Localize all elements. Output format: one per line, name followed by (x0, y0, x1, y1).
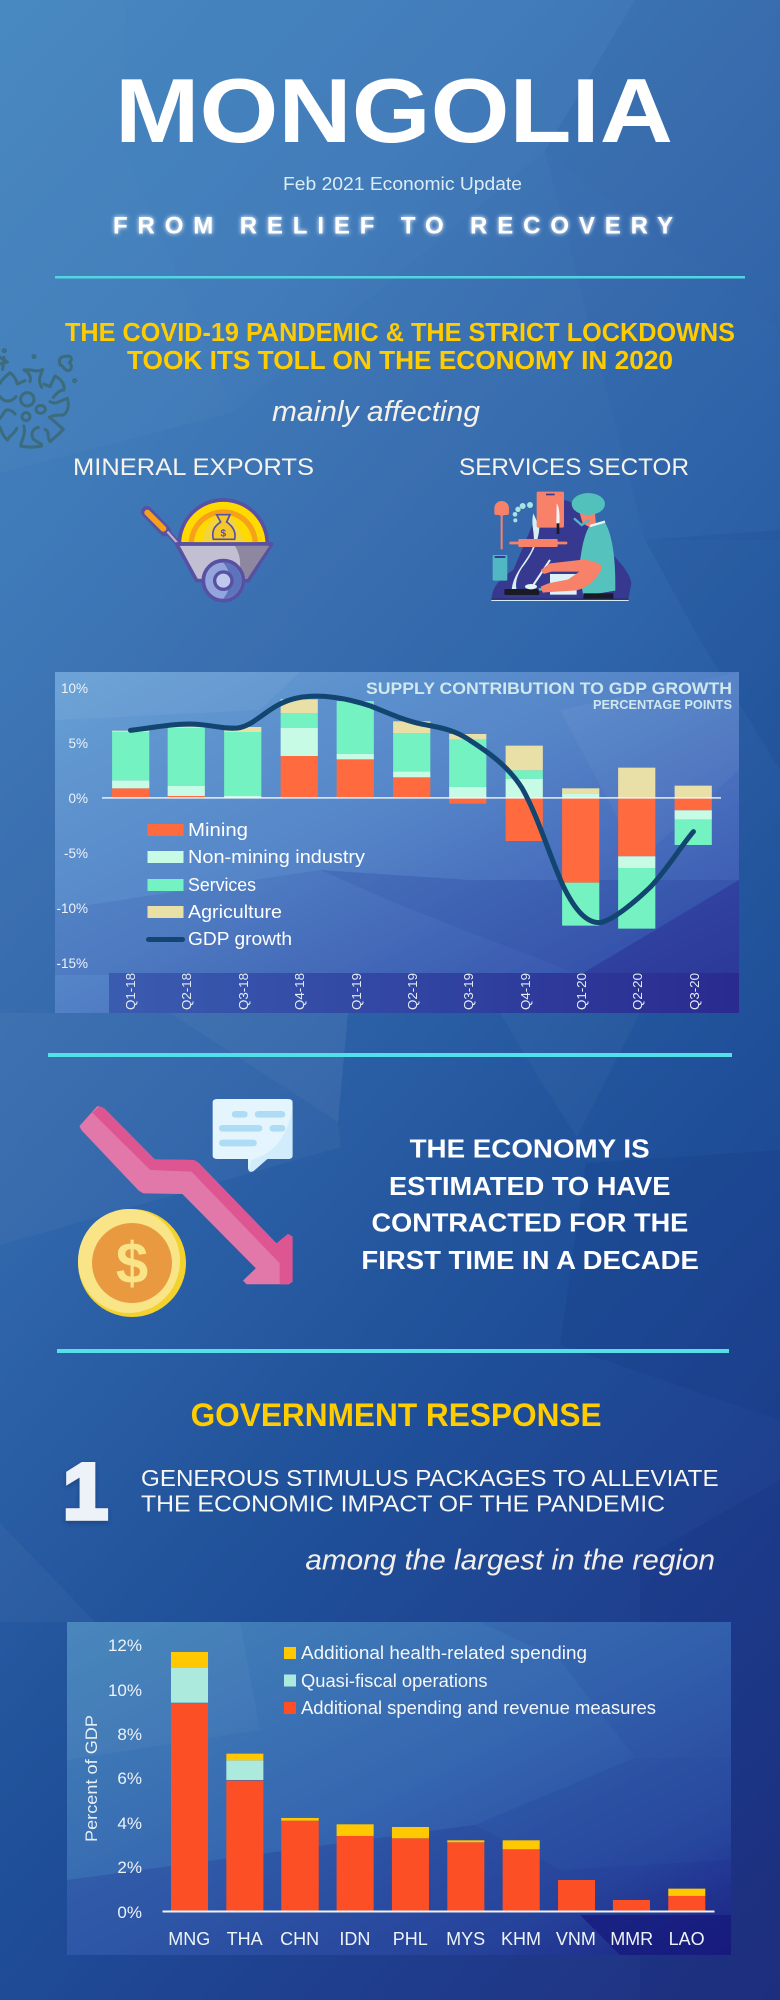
bar LAO (668, 1889, 705, 1911)
number 1: 1 (63, 1446, 108, 1536)
icon: wheelbarrow with money (147, 500, 272, 601)
chart subtitle: PERCENTAGE POINTS (593, 697, 732, 712)
icon: cook in kitchen (491, 492, 631, 601)
GDP growth line (130, 696, 693, 923)
divider 1 (55, 276, 745, 278)
chart legend: Mining (188, 820, 248, 840)
x axis labels: Q1-19 (349, 973, 364, 1010)
chart legend: GDP growth (188, 929, 292, 949)
text: stimulus packages: GENEROUS STIMULUS PACKAGES TO ALLEVIATE (141, 1465, 719, 1491)
y axis labels: 10% (108, 1681, 142, 1700)
y axis labels: 5% (68, 736, 88, 751)
y axis title: Percent of GDP (82, 1715, 101, 1842)
label: services sector: SERVICES SECTOR (459, 454, 689, 481)
chart panel: stimulus as percent of GDP (67, 1622, 731, 1955)
bars Q3-20 (675, 786, 712, 845)
x axis labels: Q2-18 (179, 973, 194, 1010)
bars Q1-18 (112, 731, 149, 798)
country labels: PHL (393, 1929, 428, 1949)
icon: falling arrow (79, 1106, 293, 1284)
bars Q2-19 (393, 721, 430, 798)
y axis labels: -10% (56, 901, 88, 916)
text: economy contracted: FIRST TIME IN A DECADE (361, 1245, 699, 1275)
y axis labels: 6% (117, 1769, 142, 1788)
chart legend: Non-mining industry (188, 847, 365, 867)
x axis labels (123, 973, 702, 1010)
bar MMR (613, 1900, 650, 1911)
country labels: VNM (556, 1929, 596, 1949)
tagline: FROM RELIEF TO RECOVERY (113, 212, 673, 240)
legend: Additional health-related spending (301, 1643, 587, 1663)
chart legend: Agriculture (188, 902, 282, 922)
x axis labels: Q2-19 (405, 973, 420, 1010)
y axis labels (56, 681, 88, 971)
chart title: SUPPLY CONTRIBUTION TO GDP GROWTH (366, 679, 732, 698)
text: economy contracted: CONTRACTED FOR THE (372, 1208, 688, 1238)
country labels: IDN (339, 1929, 370, 1949)
bar VNM (558, 1880, 595, 1911)
x axis labels: Q1-20 (574, 973, 589, 1010)
heading: pandemic impact: TOOK ITS TOLL ON THE ECONOMY IN 2020 (127, 345, 673, 375)
country labels (168, 1929, 705, 1949)
label: mineral exports: MINERAL EXPORTS (73, 454, 314, 481)
y axis labels: -15% (56, 956, 88, 971)
heading: pandemic impact (65, 317, 735, 375)
x axis labels: Q4-19 (518, 973, 533, 1010)
legend: Quasi-fiscal operations (301, 1671, 488, 1691)
text: among the largest: among the largest in the region (305, 1544, 715, 1576)
chart legend: Services (188, 875, 256, 895)
bar IDN (337, 1824, 374, 1911)
text: economy contracted: THE ECONOMY IS (410, 1133, 650, 1163)
x axis labels: Q4-18 (292, 973, 307, 1010)
bars Q1-19 (337, 701, 374, 798)
bars Q2-18 (168, 727, 205, 798)
heading: government response: GOVERNMENT RESPONSE (191, 1397, 602, 1433)
icon: dollar coin: $ (116, 1231, 148, 1296)
y axis labels: 12% (108, 1636, 142, 1655)
country labels: MYS (446, 1929, 485, 1949)
country labels: MNG (168, 1929, 210, 1949)
text: mainly affecting: mainly affecting (272, 396, 480, 428)
country labels: CHN (280, 1929, 319, 1949)
icon: virus (0, 350, 76, 447)
title: MONGOLIA (115, 61, 673, 162)
y axis labels: -5% (64, 846, 88, 861)
y axis labels: 0% (117, 1903, 142, 1922)
bar MYS (447, 1840, 484, 1911)
y axis labels: 0% (68, 791, 88, 806)
bar KHM (503, 1840, 540, 1911)
text: stimulus packages (141, 1465, 719, 1517)
chart legend (146, 820, 365, 949)
icon: dollar coin (78, 1209, 186, 1317)
text: stimulus packages: THE ECONOMIC IMPACT OF THE PANDEMIC (141, 1491, 665, 1517)
bars Q1-20 (562, 788, 599, 926)
bars Q2-20 (618, 768, 655, 929)
x axis labels: Q3-18 (236, 973, 251, 1010)
x axis labels: Q3-20 (687, 973, 702, 1010)
subtitle: date: Feb 2021 Economic Update (283, 174, 522, 194)
legend: Additional spending and revenue measures (301, 1698, 656, 1718)
bar THA (226, 1754, 263, 1911)
legend (284, 1643, 656, 1718)
y axis labels: 8% (117, 1725, 142, 1744)
icon: wheelbarrow with money: $ (221, 529, 227, 540)
country labels: MMR (610, 1929, 653, 1949)
country labels: KHM (501, 1929, 541, 1949)
icon: speech bubble (213, 1099, 293, 1172)
bar PHL (392, 1827, 429, 1911)
stacked bars (112, 699, 712, 929)
text: economy contracted (361, 1133, 699, 1275)
y axis labels: 4% (117, 1814, 142, 1833)
chart panel: supply contribution to GDP growth (55, 672, 739, 1013)
x axis (162, 1910, 714, 1912)
bar CHN (281, 1818, 319, 1911)
x axis labels: Q2-20 (630, 973, 645, 1010)
country labels: LAO (669, 1929, 705, 1949)
zero axis (102, 797, 721, 799)
country labels: THA (227, 1929, 263, 1949)
y axis labels: 10% (61, 681, 88, 696)
bars Q4-18 (281, 699, 318, 798)
text: economy contracted: ESTIMATED TO HAVE (389, 1171, 670, 1201)
stacked bars (171, 1652, 705, 1911)
y axis labels (108, 1636, 142, 1922)
divider 3 (57, 1349, 729, 1353)
bar MNG (171, 1652, 208, 1911)
heading: pandemic impact: THE COVID-19 PANDEMIC & THE STRICT LOCKDOWNS (65, 317, 735, 347)
x axis labels: Q3-19 (461, 973, 476, 1010)
bars Q3-18 (224, 727, 261, 798)
divider 2 (48, 1053, 732, 1057)
bars Q4-19 (506, 746, 543, 841)
y axis labels: 2% (117, 1858, 142, 1877)
bars Q3-19 (449, 734, 486, 804)
x axis labels: Q1-18 (123, 973, 138, 1010)
